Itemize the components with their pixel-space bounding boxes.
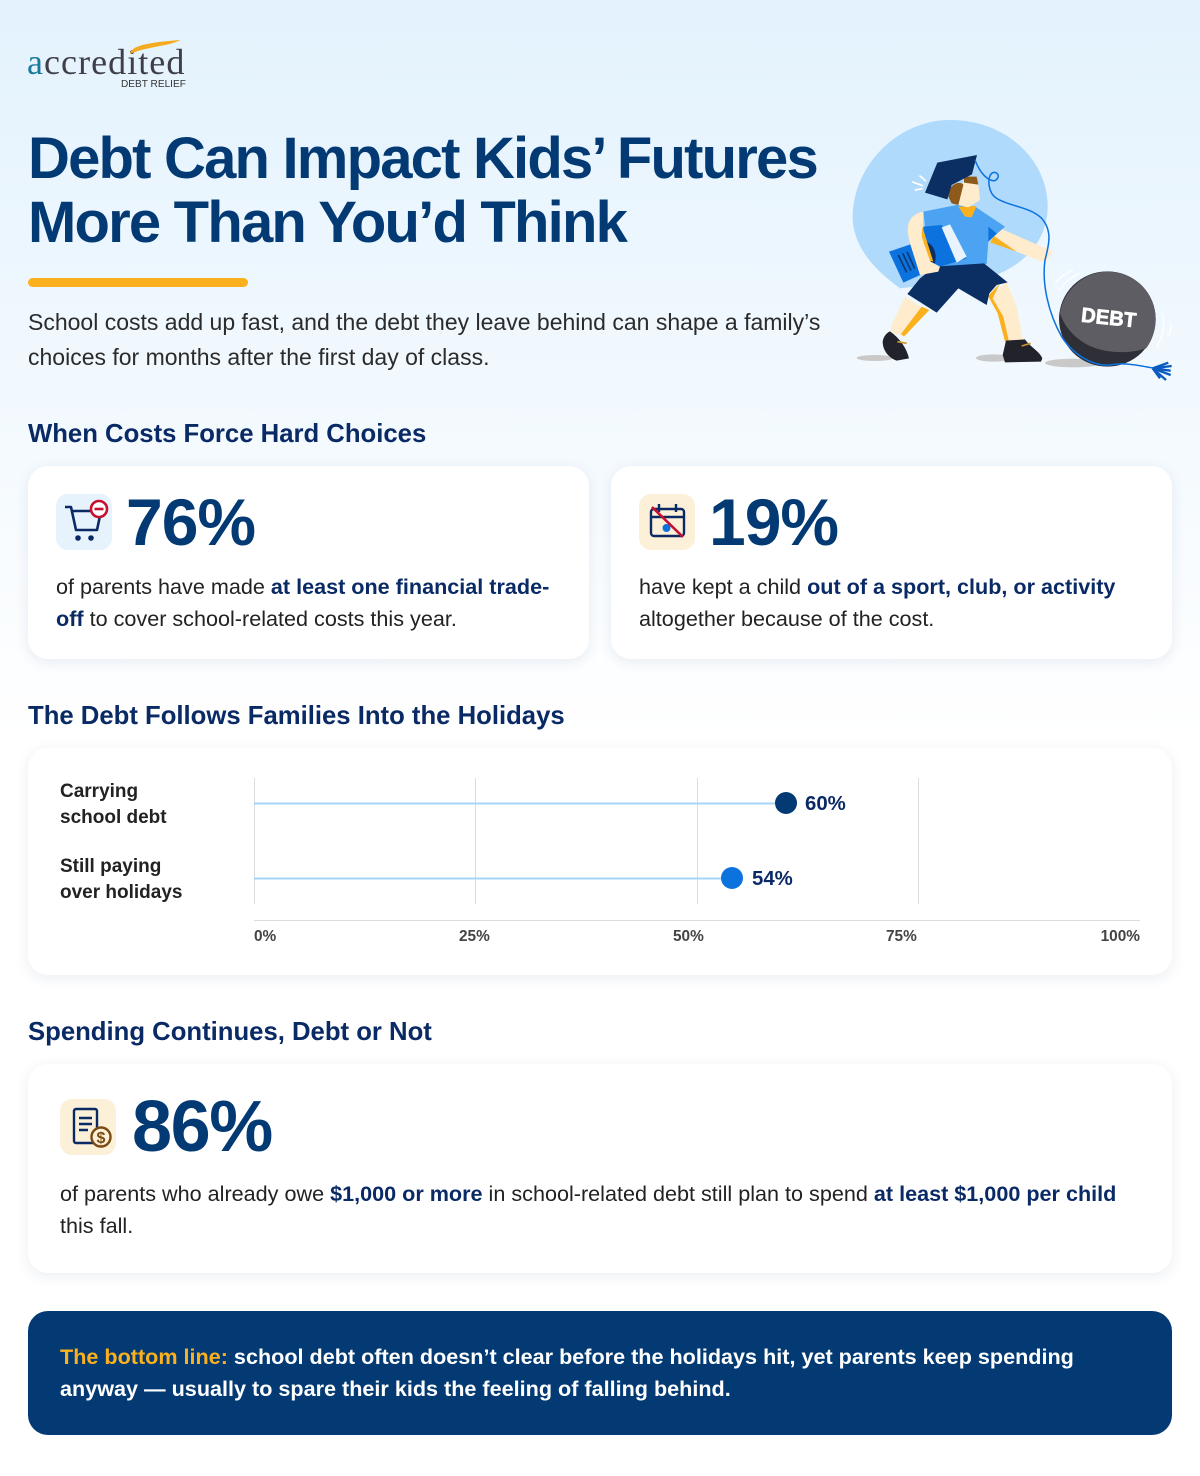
- heading: spending: Spending Continues, Debt or Not: [28, 1018, 432, 1046]
- icon: crossed calendar: [639, 494, 695, 550]
- axis labels: [254, 928, 1140, 945]
- callout text: [60, 1344, 1074, 1401]
- row: still paying over holidays: Still paying: [60, 856, 161, 877]
- intro text: choices for months after the first day of class.: [28, 344, 489, 370]
- row: still paying over holidays: 54%: [752, 868, 793, 890]
- stat value: 86%: [132, 1087, 272, 1167]
- stat description: of parents have made at least one financial trade-: [56, 574, 549, 599]
- row: still paying over holidays: [60, 856, 793, 903]
- title: [28, 126, 817, 255]
- panel: 76% stat: [28, 466, 589, 659]
- panel: lollipop chart: [28, 748, 1172, 975]
- icon: bill with dollar: $: [97, 1130, 106, 1147]
- tassel: [1153, 363, 1172, 380]
- stat description: [56, 574, 549, 631]
- debt label: DEBT: [1080, 304, 1138, 332]
- illustration: graduate pulling debt ball: [852, 120, 1172, 381]
- back leg: [891, 297, 922, 336]
- logo tagline: DEBT RELIEF: [121, 79, 186, 90]
- shorts: [907, 263, 1008, 313]
- intro text: [28, 309, 820, 370]
- stat description: [60, 1181, 1116, 1238]
- shoes: [883, 331, 909, 361]
- near arm: [908, 212, 940, 275]
- stat description: altogether because of the cost.: [639, 606, 934, 631]
- heading: hard choices: When Costs Force Hard Choices: [28, 420, 426, 448]
- shirt: [923, 205, 1005, 267]
- stat value: 19%: [709, 485, 838, 559]
- axis labels: 50%: [673, 928, 704, 945]
- intro text: School costs add up fast, and the debt they leave behind can shape a family’s: [28, 309, 820, 335]
- logo: [27, 40, 186, 90]
- motion lines: [1055, 269, 1171, 347]
- stat description: [639, 574, 1116, 631]
- axis labels: 0%: [254, 928, 277, 945]
- axis labels: 100%: [1101, 928, 1140, 945]
- axis labels: 75%: [886, 928, 917, 945]
- icon: shopping cart with minus: [56, 494, 112, 550]
- logo wordmark: accredited: [27, 42, 185, 82]
- row: carrying school debt: 60%: [805, 793, 846, 815]
- callout text: anyway — usually to spare their kids the feeling of falling behind.: [60, 1376, 731, 1401]
- far arm: [990, 228, 1053, 263]
- stat description: this fall.: [60, 1213, 133, 1238]
- callout: bottom line: [28, 1311, 1172, 1435]
- row: still paying over holidays: over holidays: [60, 882, 182, 903]
- icon: bill with dollar: [60, 1099, 116, 1155]
- chart: [60, 778, 1140, 945]
- row: carrying school debt: Carrying: [60, 781, 138, 802]
- title accent bar: [28, 278, 248, 287]
- books: [889, 225, 967, 283]
- stat description: have kept a child out of a sport, club, or activity: [639, 574, 1115, 599]
- background circle: [853, 120, 1048, 288]
- title: Debt Can Impact Kids’ Futures: [28, 126, 817, 191]
- front leg: [989, 282, 1023, 343]
- title: More Than You’d Think: [28, 190, 626, 255]
- row: carrying school debt: [60, 781, 846, 828]
- callout text: The bottom line: school debt often doesn’t clear before the holidays hit, yet parents keep spending: [60, 1344, 1074, 1369]
- logo swoosh: [130, 40, 181, 54]
- head and hair: [958, 182, 980, 207]
- sweat marks: [913, 176, 925, 190]
- heading: holidays: The Debt Follows Families Into the Holidays: [28, 702, 565, 730]
- row: carrying school debt: school debt: [60, 807, 167, 828]
- stat value: 76%: [126, 485, 255, 559]
- graduation cap: [925, 155, 977, 199]
- panel: 19% stat: [611, 466, 1172, 659]
- ground shadows: [857, 354, 1102, 367]
- tassel cord: [975, 160, 1155, 368]
- stat description: of parents who already owe $1,000 or more in school-related debt still plan to spend at least $1,000 per child: [60, 1181, 1116, 1206]
- debt ball: [1059, 271, 1156, 367]
- panel: 86% stat: [28, 1064, 1172, 1273]
- axis labels: 25%: [459, 928, 490, 945]
- stat description: off to cover school-related costs this year.: [56, 606, 457, 631]
